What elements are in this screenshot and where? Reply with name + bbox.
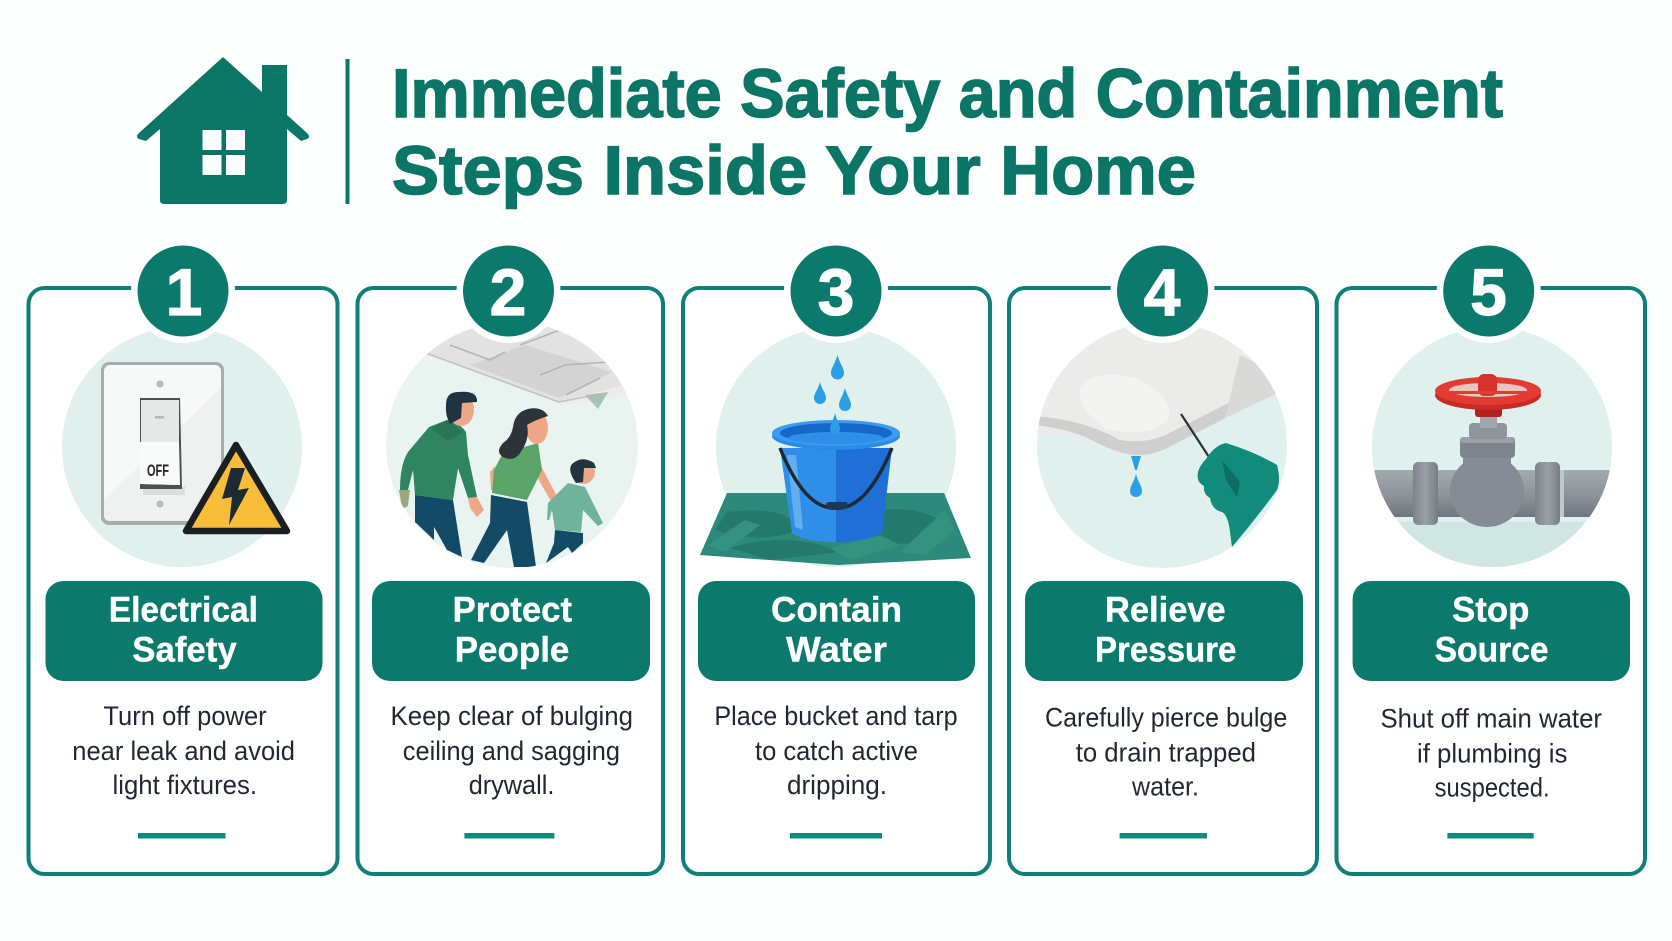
number badge 2: 2 <box>490 255 526 329</box>
text: stop source description: if plumbing is <box>1417 738 1567 768</box>
label: electrical safety <box>46 581 322 681</box>
icon: sagging ceiling and gloved hand piercing <box>1037 328 1287 568</box>
label: contain water: Contain <box>771 590 902 630</box>
number badge 4: 4 <box>1144 255 1181 329</box>
icon: light switch and warning sign: OFF <box>147 461 169 480</box>
label: contain water <box>698 581 975 681</box>
text: stop source description: suspected. <box>1435 772 1550 802</box>
title <box>392 55 1503 209</box>
label: electrical safety: Safety <box>132 630 237 670</box>
text: electrical description: near leak and avoid <box>72 736 295 766</box>
number badge 1 <box>131 239 235 343</box>
text: relieve pressure description: to drain trapped <box>1076 738 1256 768</box>
title: Steps Inside Your Home <box>392 132 1196 209</box>
label: stop source: Stop <box>1452 590 1529 630</box>
text: relieve pressure description: water. <box>1131 772 1199 802</box>
man <box>415 495 462 557</box>
text: relieve pressure description: Carefully pierce bulge <box>1045 702 1287 732</box>
icon: family walking under damaged ceiling <box>380 310 640 568</box>
title: Immediate Safety and Containment <box>392 55 1503 132</box>
header <box>137 55 1503 209</box>
text: contain water description <box>714 701 958 800</box>
icon: shut-off valve <box>1372 327 1612 572</box>
label: relieve pressure: Pressure <box>1095 630 1236 670</box>
label: protect people: Protect <box>453 590 572 630</box>
text: protect people description: ceiling and sagging <box>403 736 620 766</box>
number badge 3: 3 <box>818 255 854 329</box>
water drops <box>814 355 851 434</box>
text: protect people description <box>390 701 633 800</box>
text: protect people description: drywall. <box>469 770 554 800</box>
bucket body <box>780 448 836 542</box>
number badge 4 <box>1110 239 1214 343</box>
panel: step 1 electrical safety <box>28 239 338 874</box>
woman <box>471 495 536 567</box>
panel: step 3 contain water <box>683 239 990 874</box>
text: stop source description <box>1380 704 1602 802</box>
label: protect people <box>372 581 650 681</box>
text: contain water description: dripping. <box>787 770 887 800</box>
child <box>546 530 583 563</box>
panel: step 2 protect people <box>358 239 663 874</box>
number badge 2 <box>456 239 560 343</box>
text: electrical description: light fixtures. <box>112 770 257 800</box>
label: electrical safety: Electrical <box>109 590 258 630</box>
text: contain water description: Place bucket and tarp <box>714 701 958 731</box>
label: contain water: Water <box>786 630 887 670</box>
label: stop source <box>1353 581 1630 681</box>
label: relieve pressure: Relieve <box>1105 590 1226 630</box>
text: contain water description: to catch active <box>755 736 918 766</box>
text: relieve pressure description <box>1045 702 1287 802</box>
panel: step 4 relieve pressure <box>1009 239 1317 874</box>
text: stop source description: Shut off main water <box>1380 704 1602 734</box>
text: electrical description <box>72 701 295 800</box>
icon: bucket on tarp <box>700 327 971 567</box>
label: stop source: Source <box>1435 630 1549 670</box>
label: protect people: People <box>455 630 569 670</box>
text: protect people description: Keep clear of bulging <box>390 701 633 731</box>
number badge 3 <box>784 239 888 343</box>
number badge 5: 5 <box>1470 255 1507 329</box>
icon: light switch and warning sign <box>62 327 302 567</box>
label: relieve pressure <box>1025 581 1303 681</box>
panel: step 5 stop source <box>1336 239 1645 874</box>
number badge 5 <box>1437 239 1541 343</box>
number badge 1: 1 <box>166 255 202 329</box>
icon: house <box>137 57 309 204</box>
text: electrical description: Turn off power <box>103 701 267 731</box>
